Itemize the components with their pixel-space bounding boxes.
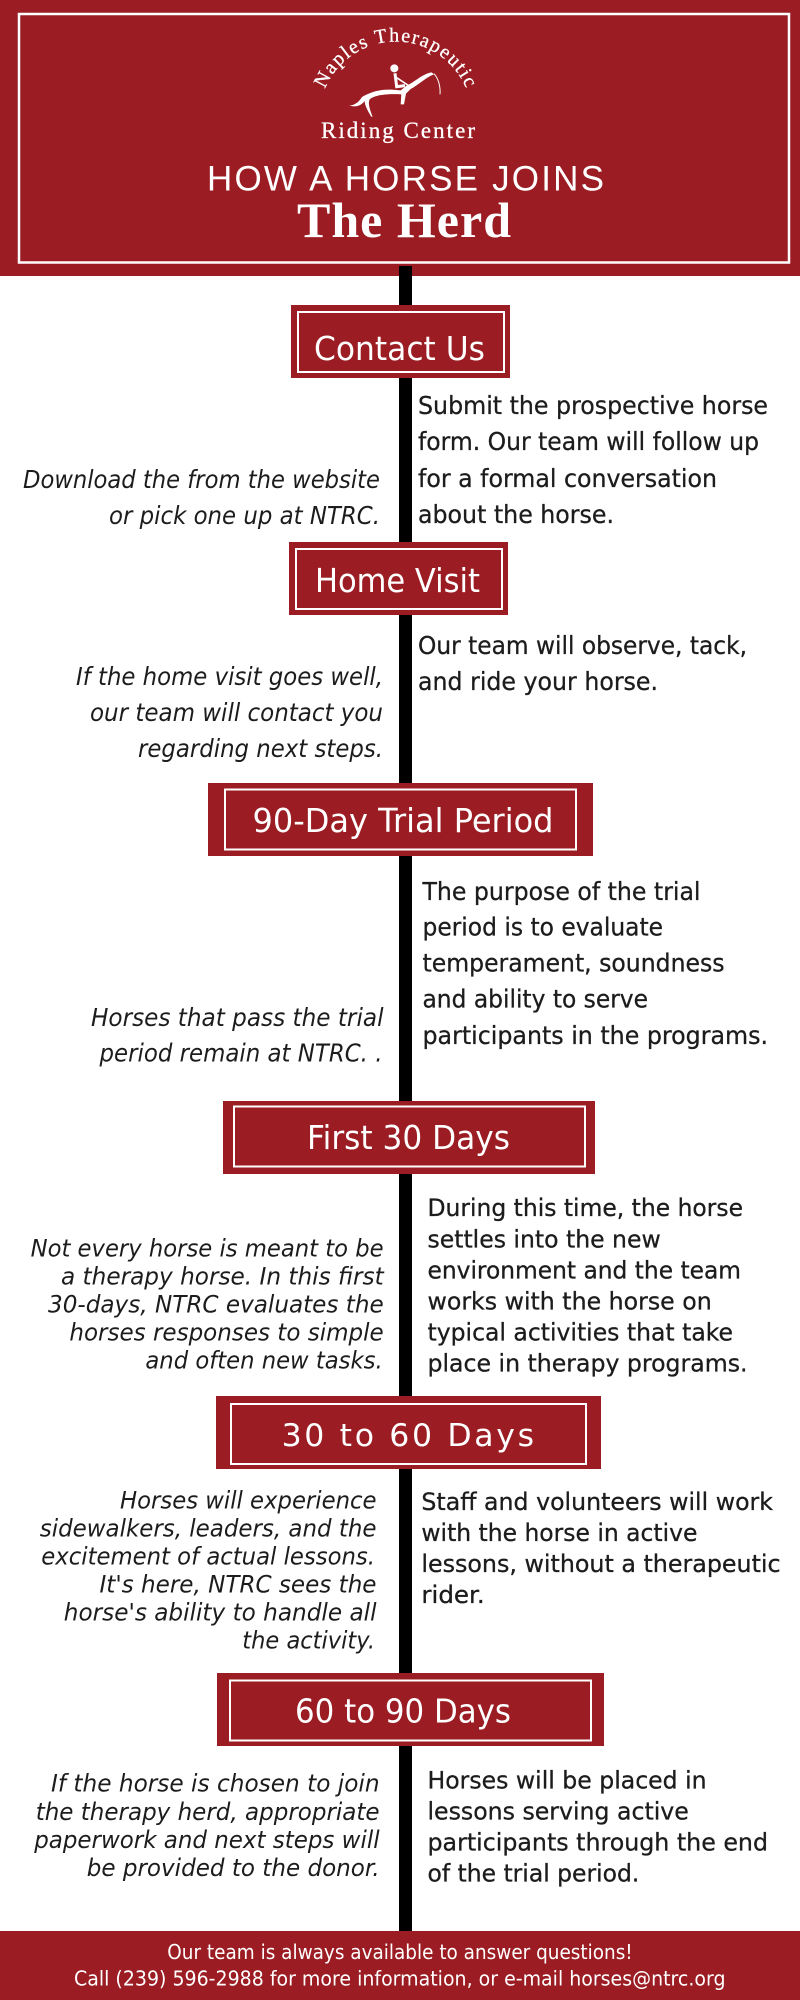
heading: 60 to 90 Days: 60 to 90 Days: [295, 1692, 511, 1731]
step: 60 to 90 Days: [33, 1673, 768, 1887]
right description: form. Our team will follow up: [418, 427, 759, 456]
left note: [91, 1003, 384, 1068]
right description: typical activities that take: [428, 1318, 733, 1346]
step: 90-Day Trial Period: [91, 783, 768, 1068]
left note: paperwork and next steps will: [33, 1826, 380, 1854]
heading: Contact Us: Contact Us: [314, 329, 485, 368]
footer: [0, 1931, 800, 2000]
right description: rider.: [421, 1581, 485, 1609]
right description: temperament, soundness: [422, 949, 724, 978]
right description: and ride your horse.: [418, 667, 658, 696]
left note: Horses that pass the trial: [91, 1003, 384, 1032]
right description: [418, 631, 747, 696]
right description: [428, 1194, 748, 1378]
footer: Call (239) 596-2988 for more information, or e-mail horses@ntrc.org: [74, 1967, 726, 1991]
left note: Not every horse is meant to be: [31, 1235, 384, 1263]
left note: It's here, NTRC sees the: [100, 1571, 376, 1599]
left note: be provided to the donor.: [87, 1854, 380, 1882]
right description: about the horse.: [418, 500, 614, 529]
right description: period is to evaluate: [422, 913, 663, 942]
left note: or pick one up at NTRC.: [109, 501, 380, 530]
left note: horses responses to simple: [69, 1319, 384, 1347]
right description: participants through the end: [428, 1828, 768, 1856]
heading: 90-Day Trial Period: [208, 783, 593, 856]
right description: Staff and volunteers will work: [421, 1488, 773, 1516]
left note: [33, 1770, 380, 1882]
right description: The purpose of the trial: [422, 877, 700, 906]
left note: [23, 465, 380, 530]
left note: Download the from the website: [23, 465, 380, 494]
heading: 90-Day Trial Period: 90-Day Trial Period: [252, 801, 554, 840]
heading: First 30 Days: [223, 1101, 595, 1174]
right description: During this time, the horse: [428, 1194, 743, 1222]
left note: If the home visit goes well,: [76, 662, 383, 691]
right description: works with the horse on: [428, 1287, 712, 1315]
left note: 30-days, NTRC evaluates the: [48, 1291, 384, 1319]
left note: [31, 1235, 385, 1375]
step: First 30 Days: [31, 1101, 748, 1378]
left note: horse's ability to handle all: [64, 1599, 377, 1627]
title line 1: HOW A HORSE JOINS: [207, 160, 604, 198]
step: 30 to 60 Days: [40, 1396, 781, 1655]
left note: [40, 1487, 377, 1655]
right description: participants in the programs.: [422, 1021, 768, 1050]
right description: lessons serving active: [428, 1797, 689, 1825]
left note: our team will contact you: [90, 698, 383, 727]
heading: First 30 Days: First 30 Days: [307, 1118, 510, 1157]
left note: the activity.: [242, 1627, 375, 1655]
heading: 30 to 60 Days: [216, 1396, 601, 1469]
right description: for a formal conversation: [418, 464, 717, 493]
right description: [421, 1488, 781, 1609]
logo: Naples Therapeutic Riding Center: [313, 28, 475, 144]
left note: a therapy horse. In this first: [61, 1263, 385, 1291]
header band: [0, 0, 800, 276]
right description: of the trial period.: [428, 1859, 639, 1887]
right description: [418, 391, 768, 529]
left note: sidewalkers, leaders, and the: [40, 1515, 377, 1543]
right description: lessons, without a therapeutic: [421, 1550, 781, 1578]
step: Contact Us: [23, 305, 768, 530]
footer: Our team is always available to answer questions!: [167, 1940, 633, 1964]
left note: regarding next steps.: [138, 734, 383, 763]
right description: settles into the new: [428, 1225, 661, 1253]
icon: horse and rider: [349, 64, 440, 117]
heading: 60 to 90 Days: [217, 1673, 604, 1746]
heading: Home Visit: Home Visit: [315, 561, 480, 600]
heading: Home Visit: [289, 542, 508, 615]
left note: and often new tasks.: [145, 1347, 383, 1375]
right description: [422, 877, 768, 1050]
left note: excitement of actual lessons.: [41, 1543, 375, 1571]
step: Home Visit: [76, 542, 747, 763]
left note: Horses will experience: [120, 1487, 376, 1515]
right description: place in therapy programs.: [428, 1350, 748, 1378]
right description: Submit the prospective horse: [418, 391, 768, 420]
heading: Contact Us: [291, 305, 510, 378]
left note: the therapy herd, appropriate: [36, 1798, 380, 1826]
right description: Horses will be placed in: [428, 1766, 707, 1794]
left note: If the horse is chosen to join: [51, 1770, 380, 1798]
heading: 30 to 60 Days: 30 to 60 Days: [282, 1418, 534, 1454]
logo: Naples Therapeutic Riding Center: Riding Center: [321, 118, 475, 143]
timeline vertical line: [399, 266, 412, 1931]
left note: [76, 662, 383, 763]
logo: Naples Therapeutic Riding Center: Naples Therapeutic: [313, 28, 474, 89]
left note: period remain at NTRC. .: [99, 1039, 382, 1068]
right description: and ability to serve: [422, 985, 648, 1014]
right description: with the horse in active: [421, 1519, 697, 1547]
right description: [428, 1766, 768, 1887]
title line 2: The Herd: [297, 192, 511, 248]
right description: environment and the team: [428, 1256, 741, 1284]
right description: Our team will observe, tack,: [418, 631, 747, 660]
